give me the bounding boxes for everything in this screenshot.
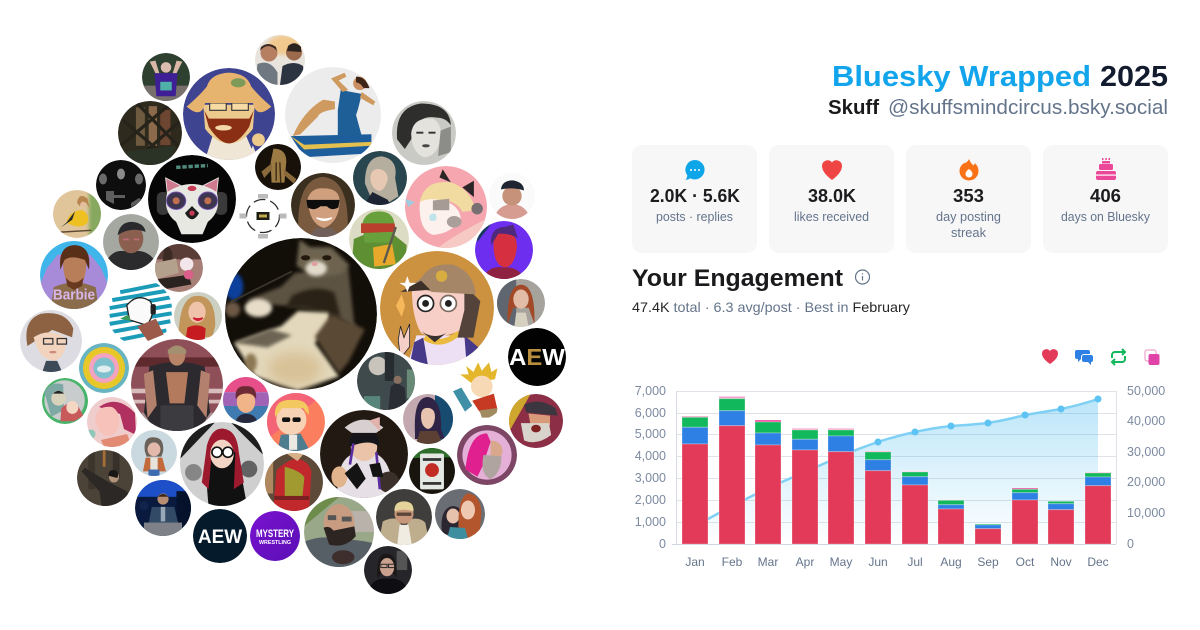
avatar: AEW cycle diagram xyxy=(240,194,286,238)
avatar: Mystery Wrestling logo: MYSTERY xyxy=(256,528,294,540)
bar: Feb xyxy=(719,396,745,544)
avatar: silver-haired woman xyxy=(353,151,407,205)
avatar: bald man with glasses xyxy=(304,497,374,567)
avatar: red sweater xyxy=(265,453,323,511)
avatar: man in black sunglasses xyxy=(291,173,355,237)
avatar: man in fur coat xyxy=(376,489,432,545)
avatar: Barbie man: Barbie xyxy=(53,286,95,303)
bar: Jan xyxy=(682,416,708,544)
avatar: man with moon xyxy=(357,352,415,410)
month labels: Jan xyxy=(685,555,705,569)
month labels: Apr xyxy=(796,555,814,569)
left axis labels: 5,000 xyxy=(635,427,666,441)
icon: heart xyxy=(822,160,842,180)
avatar: woman in glasses, black shirt xyxy=(364,546,412,594)
avatar: person with purple shirt xyxy=(142,53,190,101)
month labels: Dec xyxy=(1087,555,1109,569)
avatar: maid outfit xyxy=(320,410,408,498)
right axis labels: 40,000 xyxy=(1127,414,1165,428)
month labels: Feb xyxy=(722,555,743,569)
avatar: sunflower xyxy=(79,343,129,393)
bar: Aug xyxy=(938,500,964,544)
left axis labels: 6,000 xyxy=(635,406,666,420)
value: 406 xyxy=(1090,186,1121,206)
avatar: pink cat-ear anime xyxy=(405,166,487,248)
avatar: Mystery Wrestling logo xyxy=(250,511,300,561)
avatar: orange capped illustration xyxy=(380,251,494,365)
left axis labels: 3,000 xyxy=(635,471,666,485)
icon: speech bubble xyxy=(685,160,705,180)
avatar: AEW navy logo xyxy=(193,509,247,563)
avatar: dark band photo xyxy=(96,160,146,210)
avatar: PEZ pinup xyxy=(285,67,381,163)
value: 38.0K xyxy=(808,186,856,206)
left axis labels: 0 xyxy=(659,537,666,551)
left axis labels: 7,000 xyxy=(635,384,666,398)
legend: replies bubbles xyxy=(1075,350,1093,365)
avatar: teal scribble headset xyxy=(109,283,172,341)
left axis labels xyxy=(635,384,666,551)
right axis labels: 30,000 xyxy=(1127,445,1165,459)
avatar: couple with green ring xyxy=(42,378,88,424)
avatar: plush on couch xyxy=(155,244,203,292)
month labels: Oct xyxy=(1016,555,1035,569)
stat card: likes received xyxy=(769,145,894,253)
bar: Sep xyxy=(975,524,1001,544)
stat card: days on Bluesky xyxy=(1043,145,1168,253)
avatar: illustrated duo xyxy=(255,35,305,85)
avatar: woman with violet hair xyxy=(403,394,453,444)
label: likes received xyxy=(794,210,869,224)
value: 2.0K · 5.6K xyxy=(650,186,740,206)
legend: likes heart xyxy=(1042,349,1058,364)
month labels: Jul xyxy=(907,555,923,569)
stat card: posts and replies xyxy=(632,145,757,253)
avatar: pink hair illustrated xyxy=(86,397,137,447)
avatar: blonde-tone red hair portrait xyxy=(497,279,545,327)
avatar: reading cartoon boy xyxy=(453,362,498,418)
bar: Apr xyxy=(792,428,818,544)
avatar: black and white portrait xyxy=(392,101,456,165)
legend: reposts arrows xyxy=(1112,349,1125,365)
left axis labels: 1,000 xyxy=(635,515,666,529)
avatar: grey stage figure xyxy=(77,450,133,506)
icon: cake xyxy=(1096,158,1116,180)
month labels: Nov xyxy=(1050,555,1072,569)
stacked bars xyxy=(682,396,1111,544)
avatar: man in cap xyxy=(496,180,528,219)
stat card: day posting streak xyxy=(906,145,1031,253)
right axis labels xyxy=(1127,384,1165,551)
avatar: sugar skull cat xyxy=(148,155,236,243)
engagement chart xyxy=(635,384,1165,569)
month labels: May xyxy=(830,555,852,569)
month labels: Aug xyxy=(940,555,962,569)
cumulative line xyxy=(695,399,1098,526)
label: days on Bluesky xyxy=(1061,210,1151,224)
label: posts · replies xyxy=(656,210,733,224)
left axis labels: 2,000 xyxy=(635,493,666,507)
month labels xyxy=(685,555,1109,569)
avatar: boy on pride stripes xyxy=(223,377,269,423)
engagement summary: 47.4K total · 6.3 avg/post · Best in February xyxy=(632,299,910,315)
avatar: blonde in red xyxy=(174,292,222,340)
left axis labels: 4,000 xyxy=(635,449,666,463)
avatar: canned monster xyxy=(409,448,455,494)
avatar: wrestler xyxy=(131,339,223,431)
avatar bubble cluster xyxy=(20,35,566,594)
avatar: AEW navy logo: AEW xyxy=(198,526,243,548)
avatar: pink beard portrait xyxy=(457,425,517,485)
avatar: two women xyxy=(435,489,485,539)
handle: @skuffsmindcircus.bsky.social xyxy=(888,97,1168,119)
cumulative area xyxy=(695,399,1098,544)
bar: May xyxy=(828,428,854,544)
label second line: streak xyxy=(951,226,987,240)
right axis labels: 50,000 xyxy=(1127,384,1165,398)
heading: Your Engagement: Your Engagement xyxy=(632,265,843,292)
avatar: dark figure xyxy=(255,144,301,190)
avatar: safari hat bitmoji xyxy=(183,68,275,160)
month labels: Jun xyxy=(868,555,888,569)
cumulative points xyxy=(874,396,1102,446)
value: 353 xyxy=(953,186,984,206)
avatar: bearded man in cap xyxy=(509,394,563,448)
bar: Dec xyxy=(1085,472,1111,544)
icon: info xyxy=(856,270,870,284)
avatar: goth red hair glasses xyxy=(180,422,264,506)
avatar: ninja turtle xyxy=(349,209,409,269)
avatar: blonde chibi on coral xyxy=(267,393,325,451)
chart grid xyxy=(672,391,1116,544)
bar: Oct xyxy=(1012,488,1038,544)
avatar: woman with headwrap xyxy=(103,214,159,270)
avatar: AEW black logo: AEW xyxy=(509,344,565,370)
title: Bluesky Wrapped 2025: Bluesky Wrapped xyxy=(832,61,1091,93)
bar: Mar xyxy=(755,420,781,544)
chart legend icons xyxy=(1042,349,1160,365)
right axis labels: 0 xyxy=(1127,537,1134,551)
bar: Nov xyxy=(1048,501,1074,544)
avatar: Mystery Wrestling logo: WRESTLING xyxy=(259,540,291,546)
avatar: Barbie man xyxy=(40,241,108,309)
right axis labels: 20,000 xyxy=(1127,475,1165,489)
month labels: Sep xyxy=(977,555,999,569)
right axis labels: 10,000 xyxy=(1127,506,1165,520)
icon: flame xyxy=(960,159,978,180)
avatar: purple background red face xyxy=(475,221,533,279)
title year: 2025 xyxy=(1100,61,1168,93)
avatar: AEW black logo xyxy=(508,328,566,386)
avatar: small doll xyxy=(131,430,177,476)
month labels: Mar xyxy=(758,555,778,569)
display name: Skuff xyxy=(828,97,879,119)
avatar: brown hair glasses xyxy=(20,310,82,372)
legend: quotes squares xyxy=(1145,350,1160,365)
avatar: large tabby cat photo xyxy=(225,238,377,390)
label: day posting xyxy=(936,210,1001,224)
avatar: dark cage xyxy=(118,101,182,165)
bar: Jul xyxy=(902,471,928,544)
avatar: man in suit on blue stage xyxy=(135,480,191,536)
bar: Jun xyxy=(865,451,891,544)
avatar: yellow bird xyxy=(53,190,103,238)
